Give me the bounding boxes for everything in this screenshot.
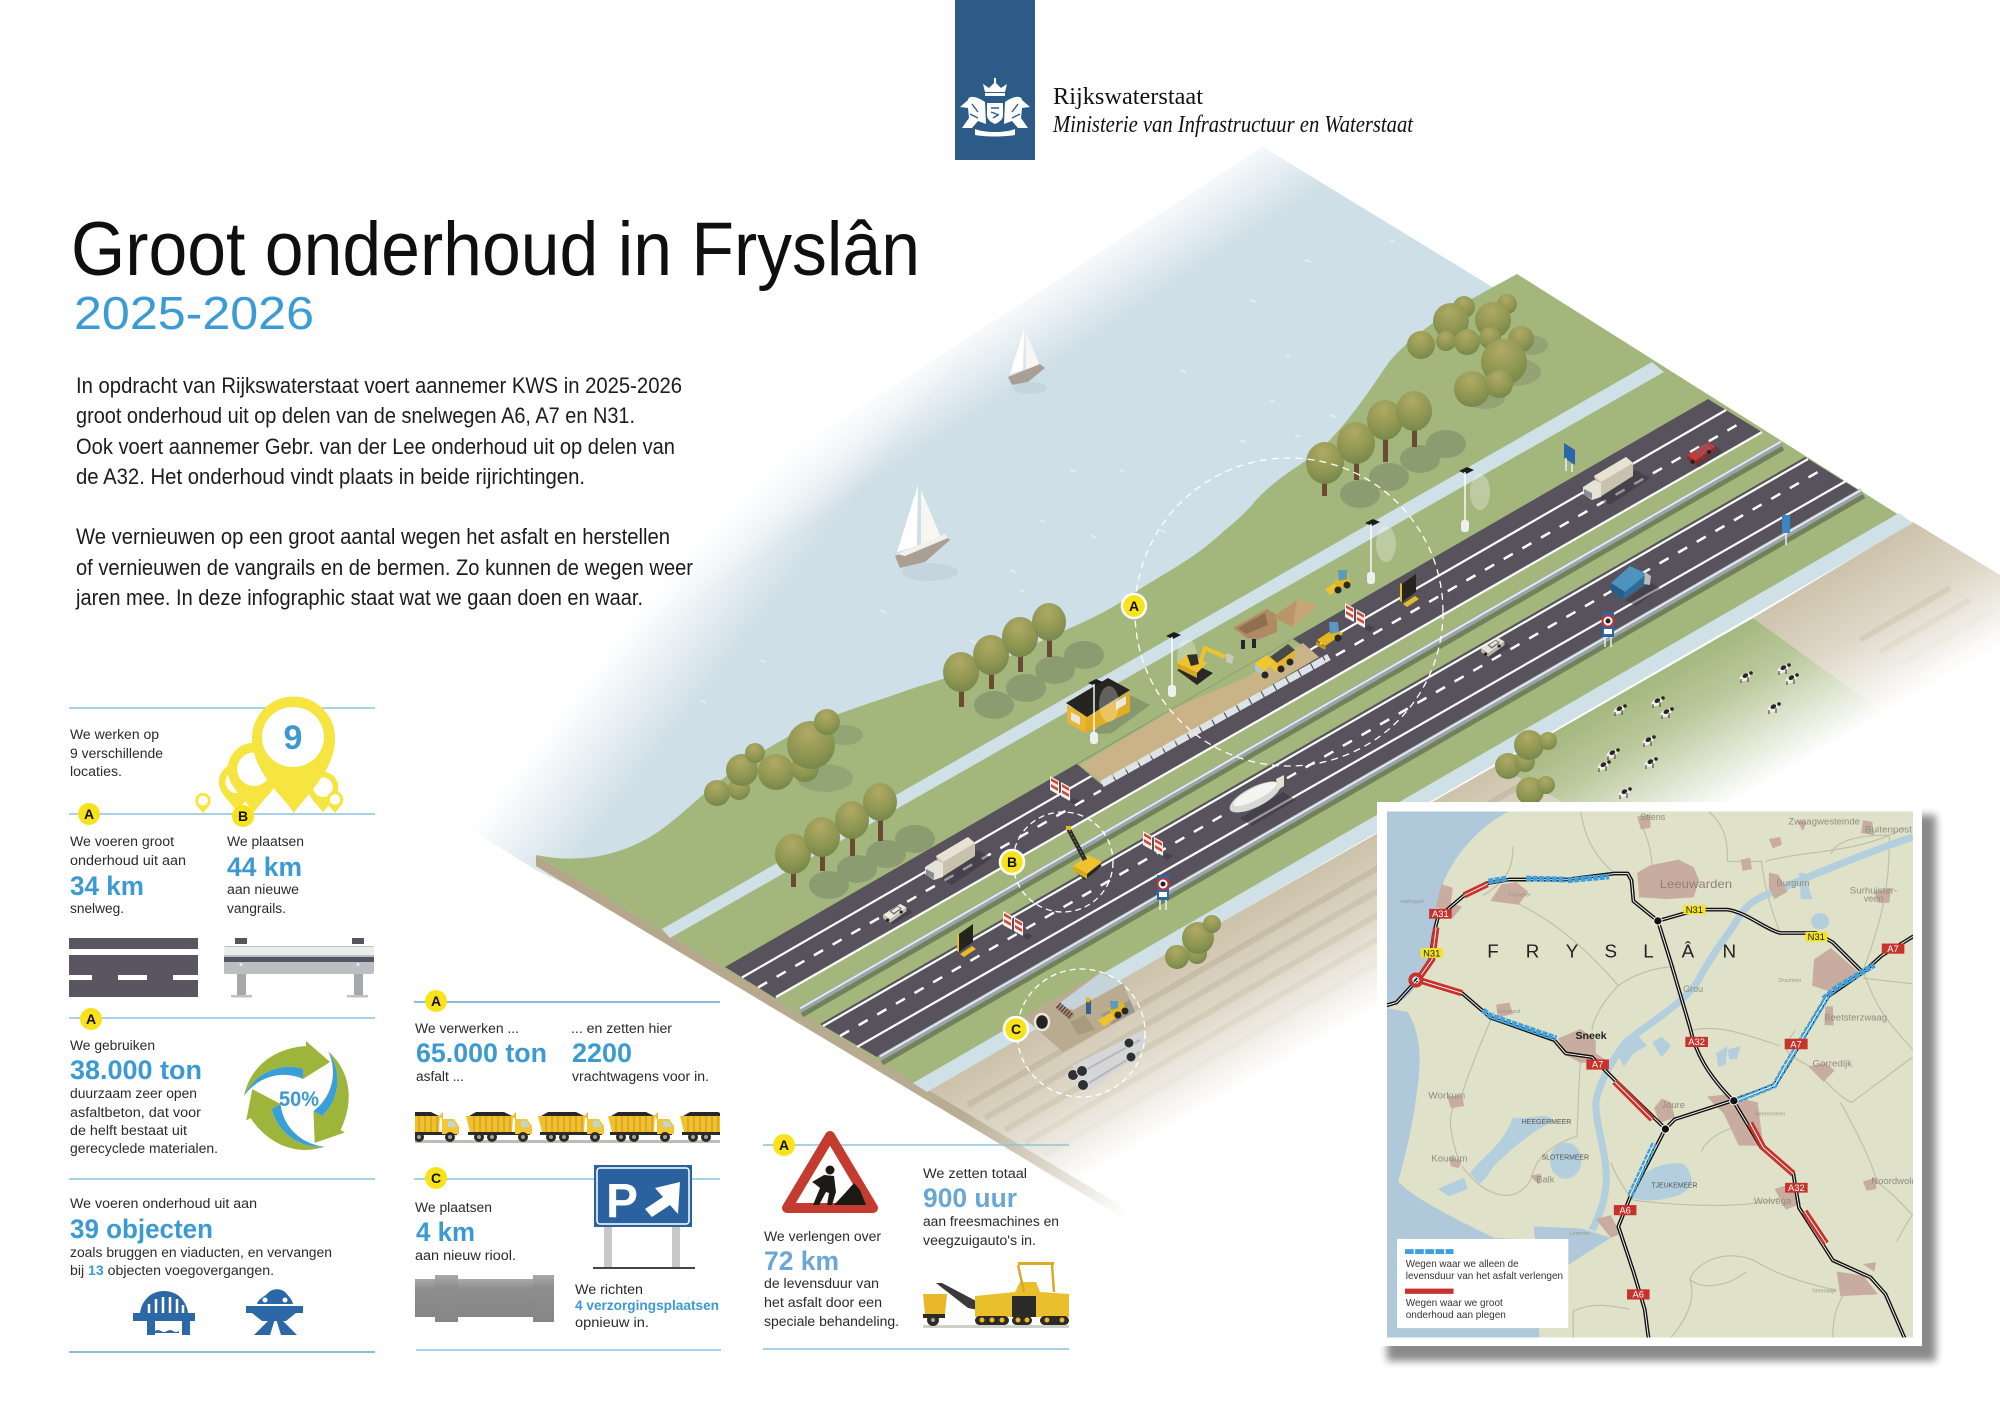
ground side edge xyxy=(536,855,1130,1222)
badge A asphalt tons: A xyxy=(431,993,441,1009)
fact: 72 km: het asfalt door een xyxy=(764,1295,882,1311)
place names: Bolsward xyxy=(1497,1009,1520,1015)
fact: 900 uur: 900 uur xyxy=(923,1183,1017,1213)
road labels: A6 xyxy=(1619,1204,1631,1215)
region label Fryslân: Â xyxy=(1682,940,1695,961)
garbage truck blue xyxy=(1611,566,1660,606)
road markings xyxy=(742,410,1846,1047)
guardrail crane zone B xyxy=(1066,826,1102,880)
field: pasture xyxy=(1497,618,1950,900)
sailboat small xyxy=(1008,329,1047,394)
sewer works zone C xyxy=(1023,972,1145,1092)
badge B xyxy=(1000,850,1024,874)
minor roads xyxy=(1450,811,1913,1338)
trees along south canal xyxy=(1165,730,1557,969)
panel: lifetime extension xyxy=(763,1134,1069,1349)
header: logo and organisation xyxy=(955,0,1414,160)
fact: 900 uur: We zetten totaal xyxy=(923,1166,1027,1182)
icon: recycling arrows 50%: 50% xyxy=(279,1088,319,1111)
place names: Gorredijk xyxy=(1813,1059,1853,1069)
place names: TJEUKEMEER xyxy=(1651,1181,1698,1190)
water xyxy=(338,147,1530,950)
icon: road surface xyxy=(69,938,198,997)
map legend: Wegen waar we alleen de xyxy=(1406,1259,1519,1270)
motorways xyxy=(1387,874,1913,1338)
badge A: A xyxy=(1129,598,1139,614)
work zone verge xyxy=(1077,639,1319,785)
fact: 72 km: de levensduur van xyxy=(764,1276,879,1292)
fact: 34 km motorway: onderhoud uit aan xyxy=(70,853,186,869)
field: upper right tan xyxy=(1753,522,2000,800)
badge C xyxy=(425,1167,447,1189)
badge C: C xyxy=(431,1170,441,1186)
panel: sewer and parking xyxy=(414,1165,721,1350)
water fade upper xyxy=(338,147,1530,950)
road labels xyxy=(1421,904,1904,1300)
fact: 38.000 ton: duurzaam zeer open xyxy=(70,1086,197,1102)
fact: 4 service areas: We richten xyxy=(575,1282,643,1298)
place names: Workum xyxy=(1428,1091,1465,1101)
tree row south-west xyxy=(775,783,935,899)
field furrows xyxy=(968,588,2000,1180)
icon: guardrail xyxy=(224,938,374,998)
fact: 900 uur: aan freesmachines en xyxy=(923,1214,1059,1230)
fact: 39 objecten: zoals bruggen en viaducten, en vervangen xyxy=(70,1245,332,1261)
fact: 39 objecten xyxy=(70,1196,332,1279)
tree row north xyxy=(1306,391,1466,508)
intro text: jaren mee. In deze infographic staat wat we gaan doen en waar. xyxy=(75,585,643,610)
place names: HEEGERMEER xyxy=(1522,1117,1572,1126)
road labels: N31 xyxy=(1686,904,1703,915)
road centre lines on sections xyxy=(1419,884,1827,1243)
ministry name: Ministerie van Infrastructuur en Waterstaat xyxy=(1052,112,1414,138)
temporary concrete barrier xyxy=(1102,657,1329,784)
canal north xyxy=(662,362,1664,938)
fact: 34 km motorway: We voeren groot xyxy=(70,834,174,850)
work zone sand xyxy=(1080,643,1319,782)
place names: Beetsterzwaag xyxy=(1824,1012,1887,1022)
intro text: We vernieuwen op een groot aantal wegen het asfalt en herstellen xyxy=(76,524,670,549)
place names: veen xyxy=(1864,894,1883,904)
location circle B xyxy=(1013,812,1113,912)
fact: 38.000 ton: We gebruiken xyxy=(70,1038,155,1054)
small island xyxy=(1408,1008,1426,1035)
region label Fryslân: Y xyxy=(1566,940,1579,961)
badge B: B xyxy=(1007,854,1017,870)
icon: bridge xyxy=(133,1291,195,1335)
road labels: N31 xyxy=(1423,947,1440,958)
sailboat large xyxy=(895,485,958,581)
tree row centre xyxy=(943,603,1104,719)
road labels: A7 xyxy=(1887,943,1899,954)
road labels: A32 xyxy=(1788,1182,1805,1193)
place names: Leeuwarden xyxy=(1660,878,1732,891)
road north carriageway xyxy=(725,399,1762,998)
locations text: locaties. xyxy=(70,764,122,780)
bottom lake xyxy=(1534,1226,1610,1264)
fact: 38.000 ton: asfaltbeton, dat voor xyxy=(70,1105,201,1121)
blue direction signs xyxy=(1157,443,1790,910)
fact: 65.000 ton xyxy=(415,1021,547,1085)
tanker truck xyxy=(1226,775,1296,826)
roundabout and junctions xyxy=(1410,917,1738,1133)
fact: 72 km: speciale behandeling. xyxy=(764,1314,899,1330)
fact: 4 km sewer: 4 km xyxy=(416,1217,475,1247)
icon: row of dump trucks xyxy=(415,1112,720,1143)
badge C: C xyxy=(1011,1021,1021,1037)
location circle C xyxy=(1017,969,1145,1097)
place names: Buitenpost xyxy=(1865,825,1912,835)
region label Fryslân: N xyxy=(1723,940,1736,961)
place names: Burgum xyxy=(1776,878,1810,888)
tree cluster west xyxy=(704,709,863,806)
fact: 65.000 ton: asfalt ... xyxy=(416,1069,464,1085)
barriers and arrow boards xyxy=(957,574,1419,957)
fact: 900 uur: veegzuigauto's in. xyxy=(923,1233,1036,1249)
place names: Heerenveen xyxy=(1755,1111,1785,1117)
region label Fryslân: L xyxy=(1643,940,1654,961)
road labels: N31 xyxy=(1808,931,1825,942)
grass ground xyxy=(536,274,1899,1090)
fact: 44 km guardrail: We plaatsen xyxy=(227,834,304,850)
panel: left column facts xyxy=(69,696,376,1352)
icon: coat of arms xyxy=(960,78,1030,136)
map frame xyxy=(1377,802,1922,1346)
locations text: We werken op xyxy=(70,727,159,743)
fact: 72 km: We verlengen over xyxy=(764,1229,881,1245)
map legend: onderhoud aan plegen xyxy=(1406,1310,1506,1321)
panel: asphalt quantities and trucks xyxy=(414,990,720,1143)
map legend xyxy=(1397,1239,1568,1328)
fact: 34 km motorway xyxy=(70,834,186,917)
trench and sand pile xyxy=(1233,600,1318,649)
logo bar xyxy=(955,0,1035,160)
intro text: groot onderhoud uit op delen van de snelwegen A6, A7 en N31. xyxy=(76,403,635,428)
field: lower tan xyxy=(927,765,1700,1225)
place names: Steenwijk xyxy=(1812,1289,1836,1295)
title: Groot onderhoud in Fryslân xyxy=(71,207,920,292)
tree cluster north-east xyxy=(1407,294,1548,409)
fact: 4 service areas xyxy=(575,1282,719,1331)
wheel loader xyxy=(1325,570,1350,595)
fact: 72 km: 72 km xyxy=(764,1246,839,1276)
organisation name: Rijkswaterstaat xyxy=(1053,84,1203,110)
fact: 2200 trucks: ... en zetten hier xyxy=(571,1021,672,1037)
sea xyxy=(1387,811,1539,1338)
lakes xyxy=(1438,873,1829,1200)
roller xyxy=(1316,622,1343,650)
region label Fryslân: F xyxy=(1487,940,1499,961)
site hut xyxy=(1066,678,1150,735)
place names: Drachten xyxy=(1778,978,1801,984)
fact: 65.000 ton: 65.000 ton xyxy=(416,1038,547,1068)
intro text: Ook voert aannemer Gebr. van der Lee onderhoud uit op delen van xyxy=(76,434,675,459)
fact: 44 km guardrail: 44 km xyxy=(227,852,302,882)
badge A lifetime xyxy=(773,1134,795,1156)
road labels: A7 xyxy=(1592,1059,1603,1070)
intro text xyxy=(75,373,693,610)
badge A motorway xyxy=(78,803,100,825)
road labels: A31 xyxy=(1432,908,1449,919)
place names: Lemmer xyxy=(1569,1231,1590,1237)
fact: 72 km xyxy=(764,1229,899,1330)
guardrails xyxy=(800,442,1864,1063)
icon: location pins xyxy=(195,696,343,813)
fact: 38.000 ton xyxy=(70,1038,218,1157)
fact: 44 km guardrail: vangrails. xyxy=(227,901,286,917)
fact: 2200 trucks: vrachtwagens voor in. xyxy=(572,1069,709,1085)
badge A asphalt: A xyxy=(86,1011,96,1027)
locations text: 9 verschillende xyxy=(70,746,163,762)
map legend: levensduur van het asfalt verlengen xyxy=(1406,1271,1563,1282)
badge C xyxy=(1004,1017,1028,1041)
place names: Noordwolde xyxy=(1871,1176,1922,1186)
place names: Harlingen xyxy=(1400,899,1424,905)
dump truck on site xyxy=(1255,644,1295,678)
fact: 2200 trucks: 2200 xyxy=(572,1038,632,1068)
place names: Koudum xyxy=(1431,1153,1467,1163)
canal xyxy=(1592,837,1913,1230)
intro text: In opdracht van Rijkswaterstaat voert aannemer KWS in 2025-2026 xyxy=(76,373,682,398)
lamp posts xyxy=(1088,467,1490,744)
icon: viaduct xyxy=(246,1289,303,1335)
place names: Franeker xyxy=(1508,892,1531,898)
fact: 4 km sewer xyxy=(415,1200,516,1264)
badge B guardrail xyxy=(232,805,254,827)
icon: parking sign xyxy=(593,1165,695,1269)
badge A xyxy=(1122,594,1146,618)
map legend: Wegen waar we groot xyxy=(1406,1298,1503,1309)
fact: 39 objecten: We voeren onderhoud uit aan xyxy=(70,1196,257,1212)
place names: Joure xyxy=(1662,1100,1685,1110)
icon: road works warning sign xyxy=(787,1136,873,1208)
place names: Stiens xyxy=(1640,812,1666,822)
fact: 39 objecten: 39 objecten xyxy=(70,1214,213,1244)
fact: 34 km motorway: 34 km xyxy=(70,871,144,901)
place names: Zwaagwesteinde xyxy=(1788,817,1860,827)
fact: 38.000 ton: 38.000 ton xyxy=(70,1055,202,1085)
red sections: major maintenance xyxy=(1419,884,1826,1243)
place names: Sneek xyxy=(1575,1031,1607,1042)
towns xyxy=(1436,814,1891,1296)
fact: 44 km guardrail: aan nieuwe xyxy=(227,882,299,898)
fact: 4 km sewer: aan nieuw riool. xyxy=(415,1248,516,1264)
place names xyxy=(1400,812,1922,1295)
fact: 44 km guardrail xyxy=(227,834,304,917)
fact: 38.000 ton: gerecyclede materialen. xyxy=(70,1141,218,1157)
road labels: A6 xyxy=(1633,1289,1644,1300)
location circle A xyxy=(1135,458,1443,766)
road labels: A32 xyxy=(1688,1036,1705,1047)
region label Fryslân xyxy=(1488,941,1735,958)
map: Fryslân overview xyxy=(1377,802,1936,1361)
intro text: of vernieuwen de vangrails en de bermen. Zo kunnen de wegen weer xyxy=(76,555,693,580)
fact: 34 km motorway: snelweg. xyxy=(70,901,124,917)
covered lane marking xyxy=(1100,661,1325,789)
badge B guardrail: B xyxy=(238,808,248,824)
place names: Wolvega xyxy=(1754,1196,1793,1206)
badge A lifetime: A xyxy=(779,1137,789,1153)
place names: SLOTERMEER xyxy=(1542,1153,1590,1162)
road south carriageway xyxy=(820,457,1858,1057)
icon: milling machine xyxy=(923,1262,1069,1328)
icon: parking sign: P xyxy=(606,1175,638,1228)
road labels: A7 xyxy=(1790,1038,1802,1049)
icon: sewer pipe xyxy=(415,1275,554,1322)
canal south xyxy=(913,513,1913,1092)
icon: recycling arrows 50% xyxy=(234,1041,376,1174)
fact: 2200 trucks xyxy=(571,1021,709,1085)
excavator xyxy=(1177,648,1234,685)
fact: 4 km sewer: We plaatsen xyxy=(415,1200,492,1216)
map shadow xyxy=(1387,815,1936,1361)
illustration: isometric motorway scene xyxy=(338,147,2000,1225)
fact: 65.000 ton: We verwerken ... xyxy=(415,1021,519,1037)
locations text xyxy=(70,727,163,780)
cows xyxy=(1596,663,1799,799)
fact: 900 uur xyxy=(923,1166,1059,1249)
badge A asphalt tons xyxy=(425,990,447,1012)
water fade lower left xyxy=(338,147,1530,950)
fact: 39 objecten: bij 13 objecten voegovergangen. xyxy=(70,1263,274,1279)
place names: Surhuister- xyxy=(1850,885,1897,895)
water ripples xyxy=(700,233,1395,703)
fact: 38.000 ton: de helft bestaat uit xyxy=(70,1123,187,1139)
truck north bottom xyxy=(925,837,992,885)
intro text: de A32. Het onderhoud vindt plaats in beide rijrichtingen. xyxy=(76,464,585,489)
fact: 4 service areas: 4 verzorgingsplaatsen xyxy=(575,1298,719,1314)
subtitle: years: 2025-2026 xyxy=(74,287,314,339)
truck north top xyxy=(1583,457,1650,505)
icon: location pins: 9 xyxy=(284,719,302,757)
place names: Balk xyxy=(1536,1174,1555,1184)
region label Fryslân: R xyxy=(1526,940,1539,961)
region label Fryslân: S xyxy=(1605,940,1617,961)
badge A motorway: A xyxy=(84,806,94,822)
blue sections: lifetime extension xyxy=(1483,877,1874,1196)
place names: Grou xyxy=(1683,984,1703,994)
cars xyxy=(883,442,1723,925)
fact: 4 service areas: opnieuw in. xyxy=(575,1315,649,1331)
badge A asphalt xyxy=(80,1008,102,1030)
